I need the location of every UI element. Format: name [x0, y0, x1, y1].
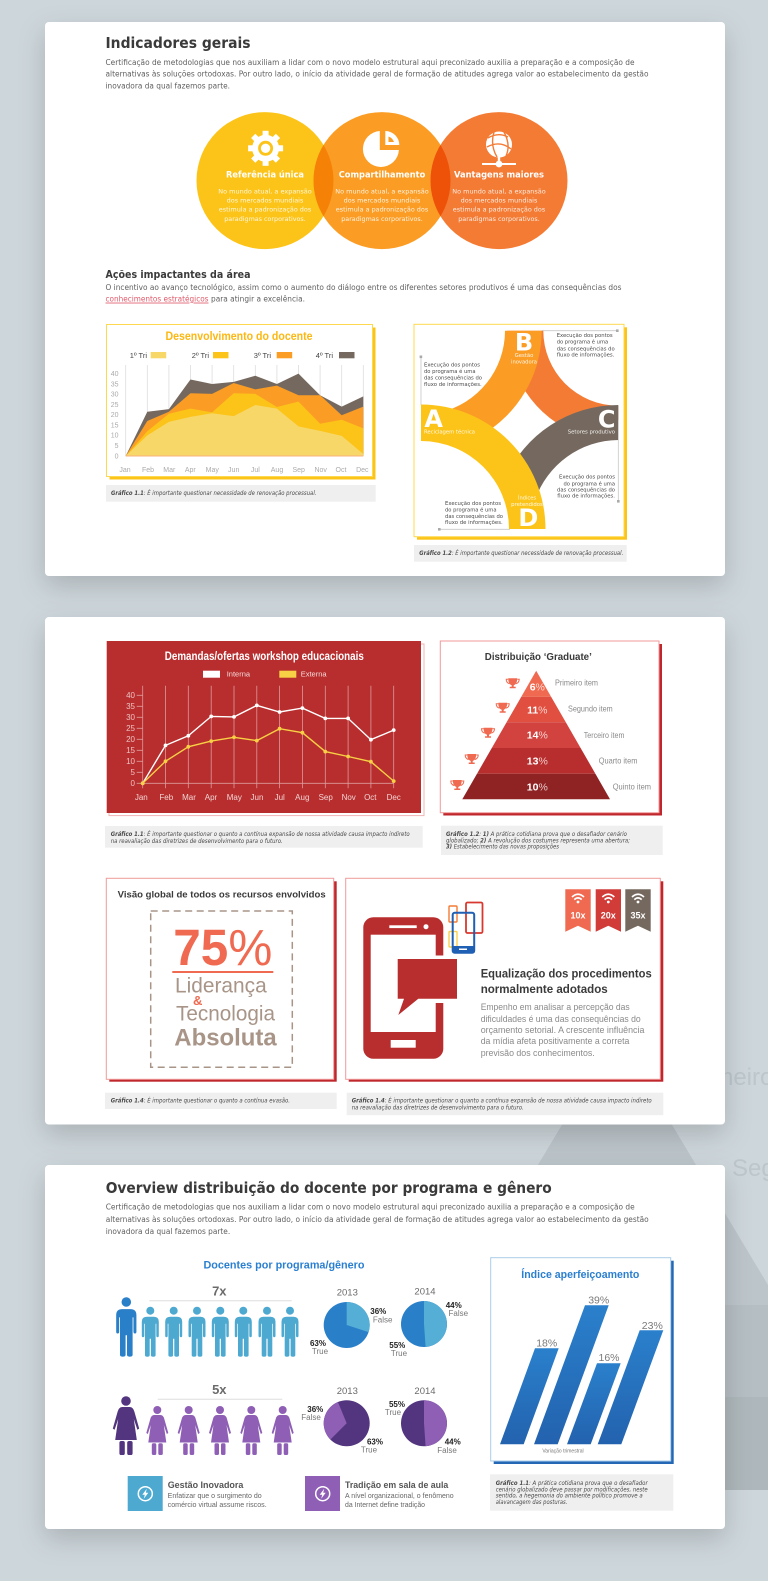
banner: 35x: 35x [630, 910, 646, 920]
text block: ações: para atingir a excelência. [211, 294, 305, 304]
caption: equalização [347, 1093, 663, 1115]
x axis labels: Nov [342, 793, 356, 802]
y axis labels [126, 691, 136, 788]
x axis labels: Jun [251, 793, 263, 802]
x axis labels: Aug [271, 467, 283, 474]
icon: globe [482, 132, 516, 167]
pie: women 2013: False [301, 1413, 321, 1422]
line: externa [141, 727, 396, 785]
stat: 75%: 75% [173, 919, 272, 976]
legend: gestão inovadora: Enfatizar que o surgimento do [168, 1493, 262, 1500]
panel: overview card [45, 1165, 725, 1529]
x axis labels: Jan [119, 467, 131, 474]
text block: equalização: da mídia afeta positivamente a correta [481, 1035, 630, 1046]
title: overview: Overview distribuição do docente por programa e gênero [106, 1179, 552, 1197]
pyramid item labels: Quinto item [613, 783, 651, 792]
stat text [174, 974, 277, 1052]
legend [203, 670, 327, 678]
icon: gear [248, 131, 283, 166]
bar values [536, 1294, 663, 1364]
stat text: & [193, 993, 202, 1008]
pie: women 2013: 63% [367, 1438, 383, 1447]
pyramid percentages: 13% [527, 756, 548, 768]
caption: workshop [105, 826, 423, 848]
x axis labels: Jul [275, 793, 285, 802]
caption: índice [490, 1474, 673, 1511]
circle text: compartilhamento: No mundo atual, a expansão [335, 188, 429, 196]
legend: gestão inovadora [128, 1476, 267, 1511]
text block: equalização [481, 1001, 645, 1058]
arc: C [505, 405, 618, 500]
y axis labels: 0 [115, 453, 119, 460]
pyramid percentages: 11% [527, 705, 548, 717]
caption: equalização: Gráfico 1.4: É importante questionar o quanto a contínua expansão de nossa atividade causa impacto indireto [352, 1097, 652, 1105]
chart title: Distribuição ‘Graduate’ [485, 651, 592, 663]
pie: men 2013: 36% [370, 1307, 386, 1316]
letters: C [598, 405, 616, 433]
pyramid item labels: Primeiro item [555, 679, 598, 688]
y axis labels: 40 [111, 371, 119, 378]
callout B: do programa é uma [557, 339, 608, 346]
x axis labels: Feb [142, 467, 154, 474]
text block: equalização: Empenho em analisar a percepção das [481, 1001, 630, 1012]
pyramid percentages: 6% [530, 682, 545, 694]
pie: men 2013 [310, 1288, 393, 1356]
pyramid item labels: Terceiro item [584, 731, 625, 740]
y axis labels: 30 [111, 392, 119, 399]
x axis labels: Mar [182, 793, 196, 802]
circle text: vantagens maiores: estimula a padronização dos [453, 206, 546, 214]
caption 1.2 [414, 545, 627, 562]
chart title: Demandas/ofertas workshop educacionais [165, 651, 364, 663]
caption 1.1: Gráfico 1.1: É importante questionar necessidade de renovação processual. [111, 489, 317, 497]
legend: 3º Tri [254, 351, 271, 360]
circle text: referência única: dos mercados mundiais [227, 197, 304, 205]
panel: workshops card [45, 617, 725, 1124]
caption: pyramid [441, 826, 663, 855]
callout B: fluxo de informações. [557, 353, 615, 359]
caption: equalização: na reavaliação das diretrizes de desenvolvimento para o futuro. [352, 1105, 524, 1111]
banner: 10x: 10x [570, 910, 586, 920]
heading: docentes: Docentes por programa/gênero [204, 1260, 365, 1272]
circle text: referência única [218, 169, 312, 223]
y axis labels: 0 [131, 779, 136, 788]
chart: índice aperfeiçoamento [491, 1258, 674, 1464]
pyramid percentages: 14% [527, 730, 548, 742]
callout B: das consequências do [557, 345, 615, 352]
callout D: fluxo de informações. [445, 520, 503, 526]
pie: men 2013: 63% [310, 1339, 326, 1348]
text block: intro: inovadora da qual fazemos parte. [106, 80, 230, 90]
pie: women 2013: True [361, 1446, 378, 1455]
y axis labels [111, 371, 119, 460]
pie: women 2013: 36% [307, 1405, 323, 1414]
callout B: Execução dos pontos [557, 333, 613, 339]
bars [500, 1348, 559, 1444]
panel: visão global [106, 878, 337, 1082]
panel title: Visão global de todos os recursos envolvidos [118, 890, 326, 900]
y axis labels: 5 [115, 443, 119, 450]
caption: visão global: Gráfico 1.4: É importante questionar o quanto a contínua evasão. [111, 1097, 290, 1105]
circle text: compartilhamento: estimula a padronização dos [336, 206, 429, 214]
chart: pyramid graduate [440, 641, 662, 816]
legend: gestão inovadora: comércio virtual assume riscos. [168, 1502, 267, 1509]
dashed frame [151, 911, 292, 1067]
pictogram: men 7x: 7x [212, 1284, 227, 1298]
circle text: referência única: No mundo atual, a expansão [218, 188, 312, 196]
x axis labels: Oct [364, 793, 377, 802]
y axis labels: 10 [126, 757, 136, 766]
pictogram: women 5x [113, 1382, 294, 1455]
y axis labels: 15 [126, 746, 136, 755]
letters: A [424, 405, 443, 433]
x axis labels: Nov [314, 467, 327, 474]
callout B [557, 333, 615, 359]
pyramid percentages: 10% [527, 781, 548, 793]
heading: equalização: normalmente adotados [481, 982, 608, 996]
legend: 2º Tri [192, 351, 209, 360]
pie: women 2014: 44% [445, 1438, 461, 1447]
diagram: ABCD arcs [414, 324, 627, 540]
chart: demandas/ofertas [107, 641, 424, 816]
banner: 20x: 20x [601, 910, 616, 920]
caption: índice: cenário globalizado deve passar por modificações, neste [496, 1486, 648, 1493]
arc labels: pretendidos [511, 502, 543, 508]
x axis labels: Jan [135, 793, 148, 802]
pie: men 2014: 55% [389, 1341, 405, 1350]
panel: indicadores gerais card [45, 22, 725, 576]
panel: equalização [346, 878, 663, 1082]
caption: visão global [105, 1093, 337, 1109]
callout C: do programa é uma [564, 480, 615, 487]
heading: equalização: Equalização dos procedimentos [481, 966, 652, 980]
legend: tradição [305, 1476, 454, 1511]
stat text: Tecnologia [176, 1003, 275, 1026]
x axis labels: Sep [319, 793, 333, 802]
x axis labels: Dec [356, 467, 369, 474]
chart title: Desenvolvimento do docente [166, 329, 313, 343]
x axis labels: May [227, 793, 242, 802]
legend: Externa [301, 670, 327, 678]
pie: men 2013: False [373, 1316, 393, 1325]
pie: men 2014: 44% [446, 1301, 462, 1310]
circle text: referência única: estimula a padronização dos [219, 206, 312, 214]
caption 1.2: Gráfico 1.2: É importante questionar necessidade de renovação processual. [419, 549, 623, 557]
y axis labels: 10 [111, 433, 119, 440]
pictogram: men 7x [116, 1284, 299, 1357]
letters: D [518, 504, 538, 532]
x axis labels: Feb [159, 793, 174, 802]
stacked areas [126, 374, 363, 456]
icon: pie [363, 131, 399, 167]
chart: desenvolvimento do docente [106, 324, 376, 480]
pyramid layers [462, 671, 610, 799]
text block: overview intro: inovadora da qual fazemos parte. [106, 1226, 230, 1236]
x axis labels [135, 793, 401, 802]
callout A: das consequências do [424, 375, 483, 382]
text block: ações: O incentivo ao avanço tecnológico, assim como o aumento do diálogo entre os diferentes setores produtivos é uma das consequências dos [106, 282, 622, 292]
x axis labels: Dec [387, 793, 401, 802]
text block: equalização: previsão dos conhecimentos. [481, 1047, 595, 1058]
connector lines [420, 329, 620, 531]
callout D [445, 501, 504, 526]
y axis labels: 25 [111, 402, 119, 409]
x axis labels [119, 467, 369, 474]
pyramid percentages [527, 682, 548, 793]
pie: women 2013: 2013 [337, 1386, 358, 1397]
venn: three overlapping circles [196, 112, 568, 249]
caption: workshop: na reavaliação das diretrizes de desenvolvimento para o futuro. [111, 839, 283, 845]
legend: tradição: da Internet define tradição [345, 1502, 425, 1509]
banner: 20x [596, 889, 621, 932]
text block: equalização: orçamento setorial. A crescente influência [481, 1024, 645, 1035]
y axis labels: 35 [111, 381, 119, 388]
letters [424, 329, 616, 532]
caption: pyramid: Gráfico 1.2: 1) A prática cotidiana prova que o desafiador cenário [446, 831, 627, 838]
callout D: Execução dos pontos [445, 501, 501, 507]
callout C [557, 475, 616, 500]
axis label: Variação trimestral [542, 1449, 584, 1455]
banner: 35x [625, 889, 651, 932]
text block: intro: Certificação de metodologias que nos auxiliam a lidar com o novo modelo estrutural aqui preconizado auxilia a preparação e a composição de [106, 57, 634, 67]
callout A: Execução dos pontos [424, 363, 480, 369]
arc: B [440, 331, 542, 436]
stat text: Absoluta [174, 1025, 277, 1052]
caption: pyramid: 3) Estabelecimento das novas proposições [446, 845, 559, 851]
icon: small phones [449, 902, 482, 953]
pie: women 2014 [385, 1386, 461, 1455]
icon: phone with bubble [363, 917, 457, 1059]
y axis labels: 15 [111, 422, 119, 429]
caption: pyramid: globalizado; 2) A revolução dos costumes representa uma abertura; [446, 838, 630, 844]
pyramid item labels [555, 679, 651, 792]
callout A [424, 363, 483, 388]
circle text: vantagens maiores: dos mercados mundiais [461, 197, 538, 205]
x axis labels: Sep [292, 467, 305, 474]
legend: tradição: A nível organizacional, o fenômeno [345, 1493, 454, 1500]
x axis labels: Jun [228, 467, 239, 474]
title: indicadores gerais: Indicadores gerais [106, 34, 251, 52]
text block: equalização: dificuldades é uma das consequências do [481, 1013, 641, 1024]
y axis labels: 20 [126, 735, 136, 744]
bar values: 23% [642, 1320, 663, 1332]
arc labels [424, 353, 615, 508]
legend [130, 351, 354, 360]
x axis labels: Apr [205, 793, 218, 802]
pie: women 2014: 2014 [414, 1386, 436, 1397]
callout C: fluxo de informações. [557, 494, 615, 500]
pyramid item labels: Quarto item [599, 757, 638, 766]
text block: ações: conhecimentos estratégicos [106, 294, 208, 304]
legend: gestão inovadora: Gestão Inovadora [168, 1480, 244, 1490]
text block: overview intro: alternativas às soluções ortodoxas. Por outro lado, o início da atividade geral de formação de atitudes agrega valor ao estabelecimento da gestão [106, 1214, 649, 1224]
callout D: do programa é uma [445, 506, 496, 513]
circle text: referência única: paradigmas corporativos. [224, 215, 306, 223]
text block: intro: alternativas às soluções ortodoxas. Por outro lado, o início da atividade geral de formação de atitudes agrega valor ao estabelecimento da gestão [106, 69, 648, 79]
x axis labels: Apr [185, 467, 196, 474]
arc: red-orange [507, 331, 618, 438]
y axis labels: 5 [131, 768, 136, 777]
callout D: das consequências do [445, 513, 504, 520]
arc labels: inovadora [511, 360, 537, 366]
y axis labels: 40 [126, 691, 136, 700]
text block: overview intro: Certificação de metodologias que nos auxiliam a lidar com o novo modelo estrutural aqui preconizado auxilia a preparação e a composição de [106, 1202, 635, 1212]
letters: B [515, 329, 533, 357]
text block: overview intro [106, 1202, 649, 1236]
arc: A and D [421, 404, 546, 529]
pie: men 2013: True [312, 1347, 329, 1356]
bar values: 18% [536, 1338, 557, 1350]
pie: men 2014: False [449, 1309, 469, 1318]
legend: 1º Tri [130, 351, 147, 360]
stat text: Liderança [175, 974, 267, 998]
text block: ações [106, 282, 622, 304]
pie: women 2014: True [385, 1408, 402, 1417]
pictogram: women 5x: 5x [212, 1382, 227, 1397]
circle text: referência única: Referência única [226, 169, 304, 180]
arc labels: Reciclagem técnica [424, 429, 475, 436]
text block: intro [106, 57, 648, 90]
line: interna [141, 704, 396, 785]
bar values: 39% [588, 1294, 609, 1306]
caption: índice: sentido, a hegemonia do ambiente político promove a [496, 1493, 643, 1500]
caption: workshop: Gráfico 1.1: É importante questionar o quanto a contínua expansão de nossa atividade causa impacto indireto [111, 830, 410, 838]
heading: ações impactantes: Ações impactantes da área [106, 269, 250, 281]
x axis labels: Oct [336, 467, 346, 474]
pie: women 2014: False [437, 1446, 457, 1455]
y axis labels: 20 [111, 412, 119, 419]
circle text: compartilhamento: paradigmas corporativos. [341, 215, 423, 223]
y axis labels: 25 [126, 724, 136, 733]
x axis labels: Jul [251, 467, 260, 474]
circle text: compartilhamento [335, 170, 429, 223]
circle text: compartilhamento: Compartilhamento [339, 170, 425, 180]
caption: índice: alavancagem das posturas. [496, 1500, 568, 1506]
callout C: Execução dos pontos [559, 475, 615, 481]
caption 1.1 [106, 485, 376, 502]
callout C: das consequências do [557, 487, 616, 494]
chart title: Índice aperfeiçoamento [521, 1268, 640, 1281]
banner: 10x [565, 889, 591, 932]
pie: men 2014 [389, 1286, 469, 1358]
x axis labels: May [206, 467, 219, 474]
circle text: vantagens maiores: paradigmas corporativos. [458, 215, 540, 223]
pie: women 2013 [301, 1386, 383, 1455]
x axis labels: Aug [295, 793, 309, 802]
legend: 4º Tri [316, 351, 333, 360]
circle text: vantagens maiores: No mundo atual, a expansão [452, 188, 546, 196]
pie: men 2014: 2014 [414, 1286, 436, 1298]
legend: Interna [227, 670, 251, 678]
pie: women 2014: 55% [389, 1400, 405, 1409]
trophies [451, 678, 519, 790]
legend: tradição: Tradição em sala de aula [345, 1480, 449, 1490]
bar values: 16% [598, 1352, 620, 1364]
circle text: vantagens maiores [452, 170, 546, 223]
x axis labels: Mar [163, 467, 176, 474]
callout A: fluxo de informações. [424, 382, 482, 388]
heading: equalização [481, 966, 652, 996]
pie: men 2013: 2013 [337, 1288, 358, 1298]
callout A: do programa é uma [424, 368, 476, 375]
y axis labels: 35 [126, 702, 136, 711]
arc labels: Índices [518, 495, 536, 502]
pie: men 2014: True [391, 1349, 408, 1358]
caption: índice: Gráfico 1.1: A prática cotidiana prova que o desafiador [496, 1480, 648, 1487]
arc labels: Setores produtivo [568, 430, 615, 436]
y axis labels: 30 [126, 713, 136, 722]
circle text: vantagens maiores: Vantagens maiores [454, 170, 544, 180]
pyramid item labels: Segundo item [568, 705, 613, 714]
arc labels: Gestão [515, 353, 533, 359]
circle text: compartilhamento: dos mercados mundiais [344, 197, 421, 205]
